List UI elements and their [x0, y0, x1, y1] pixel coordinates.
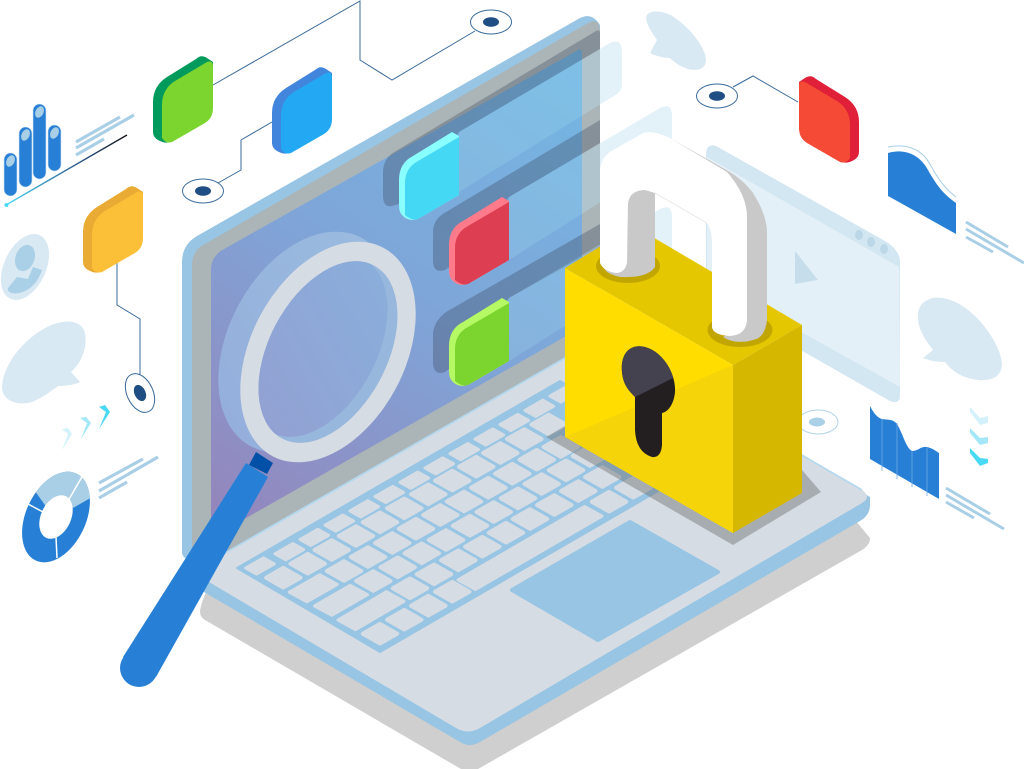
icon: green tile — [153, 56, 213, 143]
chart: area chart lower right — [870, 406, 1004, 529]
chart: area chart top right — [888, 146, 1024, 263]
icon: yellow tile — [83, 186, 143, 273]
chart: bar chart top-left — [4, 104, 134, 207]
keyboard — [237, 381, 703, 652]
icon: node below lock — [798, 410, 838, 434]
icon: node top — [470, 10, 512, 34]
laptop screen lid — [182, 16, 600, 580]
icon: node left — [182, 179, 224, 203]
shackle back — [600, 138, 767, 342]
icon: node red — [696, 84, 738, 108]
connector lines — [117, 1, 798, 378]
icon: cyan tile — [399, 132, 459, 220]
laptop shadow — [200, 520, 870, 769]
handle — [120, 452, 273, 687]
icon: check chevrons right — [970, 407, 988, 466]
lens glass — [258, 261, 398, 443]
padlock — [565, 132, 802, 533]
icon: chevrons left — [62, 405, 110, 450]
icon: speech bubble top — [646, 12, 706, 70]
icon: red tile — [799, 76, 859, 163]
icon: blue tile — [272, 67, 332, 154]
icon: user profile — [0, 226, 59, 308]
icon: speech bubble left — [2, 322, 86, 403]
lock front face — [565, 268, 733, 533]
panel: browser window — [706, 145, 900, 402]
magnifying glass — [120, 232, 416, 687]
trackpad — [512, 522, 718, 640]
lock shadow — [546, 426, 821, 545]
panel: row shadows — [383, 30, 600, 373]
shackle front — [600, 132, 747, 336]
shackle holes — [596, 249, 772, 347]
icon: speech bubble right — [918, 298, 1002, 380]
keyhole — [622, 346, 675, 457]
laptop base — [192, 338, 870, 745]
icon: red row tile — [449, 197, 509, 285]
lens front ring — [205, 212, 451, 492]
lock right face — [733, 325, 802, 533]
panel: translucent rows over the screen — [459, 60, 582, 360]
lens back rim — [183, 202, 429, 482]
icon: node yellow — [120, 369, 160, 417]
panel: translucent rows beyond the screen — [582, 42, 672, 258]
chart: donut — [22, 456, 159, 562]
icon: green row tile — [449, 298, 509, 386]
lock top face — [565, 226, 802, 365]
